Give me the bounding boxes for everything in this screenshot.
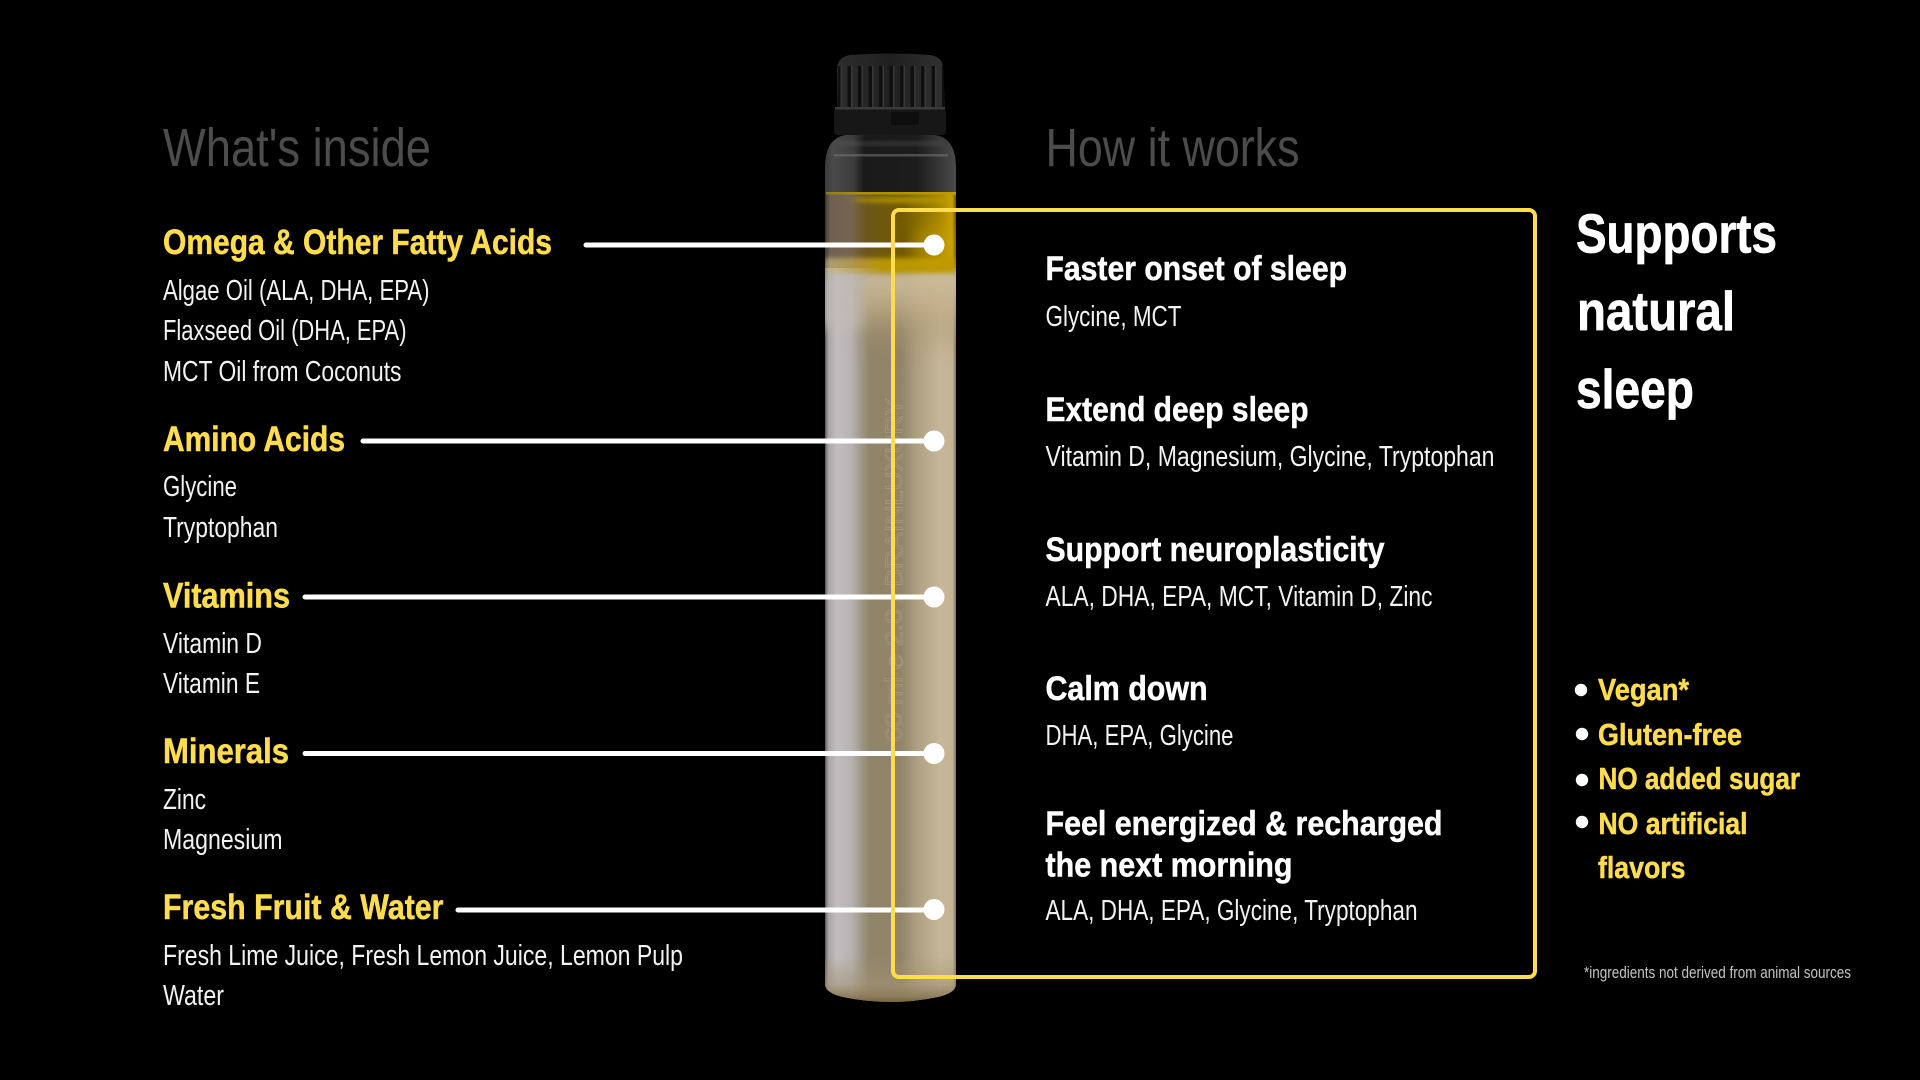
product claims list: Gluten-free <box>1598 717 1742 752</box>
benefit: feel energized and recharged: ALA, DHA, EPA, Glycine, Tryptophan <box>1046 895 1418 927</box>
bottle embossed lettering: 60 ml ℮ 2.0 / BRAINLUXURY <box>881 398 908 742</box>
headline: supports natural sleep <box>1576 202 1777 420</box>
ingredient group: omega: Flaxseed Oil (DHA, EPA) <box>163 315 406 347</box>
ingredient group: fresh fruit and water: Fresh Fruit & Water <box>163 888 444 927</box>
ingredient group: omega: MCT Oil from Coconuts <box>163 356 402 388</box>
product claims list: Vegan* <box>1598 672 1690 707</box>
ingredient group: minerals: Zinc <box>163 784 206 816</box>
ingredient group: minerals: Minerals <box>163 732 289 771</box>
connector dots <box>924 234 944 920</box>
ingredient group: vitamins: Vitamin E <box>163 668 260 700</box>
ingredient group: fresh fruit and water: Water <box>163 980 224 1012</box>
benefit: calm down: Calm down <box>1046 670 1208 708</box>
infographic canvas <box>162 54 1850 1006</box>
ingredient group: minerals <box>163 732 289 856</box>
yellow benefits frame <box>893 210 1535 977</box>
benefit: extend deep sleep: Extend deep sleep <box>1046 391 1308 429</box>
ingredient group: omega: Omega & Other Fatty Acids <box>163 223 552 262</box>
ingredient group: amino acids <box>163 420 345 544</box>
ingredient group: amino acids: Tryptophan <box>163 512 278 544</box>
benefit: extend deep sleep <box>1046 391 1494 473</box>
footnote: *ingredients not derived from animal sources <box>1584 963 1851 982</box>
benefit: faster onset of sleep <box>1046 250 1347 333</box>
panel: how it works <box>1046 118 1494 927</box>
bottle glass and liquid <box>825 135 956 1002</box>
ingredient group: vitamins <box>163 576 290 700</box>
headline: supports natural sleep: natural <box>1577 280 1735 342</box>
product claims list: NO artificial <box>1598 806 1748 841</box>
product claims list: flavors <box>1598 850 1686 885</box>
benefit: calm down: DHA, EPA, Glycine <box>1046 720 1234 752</box>
benefit: feel energized and recharged <box>1046 805 1442 927</box>
benefit: feel energized and recharged: Feel energized & recharged <box>1046 805 1442 843</box>
headline: supports natural sleep: sleep <box>1576 358 1694 420</box>
ingredient group: vitamins: Vitamin D <box>163 628 262 660</box>
ingredient group: fresh fruit and water: Fresh Lime Juice, Fresh Lemon Juice, Lemon Pulp <box>163 940 683 972</box>
benefit: faster onset of sleep: Glycine, MCT <box>1046 301 1182 333</box>
bottle cap <box>834 54 946 135</box>
product bottle <box>825 54 956 1002</box>
ingredient group: amino acids: Glycine <box>163 471 237 503</box>
benefit: support neuroplasticity: Support neuroplasticity <box>1046 531 1385 569</box>
ingredient group: minerals: Magnesium <box>163 824 282 856</box>
heading: what's inside: What's inside <box>163 118 431 178</box>
benefit: extend deep sleep: Vitamin D, Magnesium, Glycine, Tryptophan <box>1046 441 1494 473</box>
panel: what's inside <box>163 118 683 1012</box>
ingredient group: omega <box>163 223 552 388</box>
benefit: faster onset of sleep: Faster onset of sleep <box>1046 250 1347 288</box>
ingredient group: omega: Algae Oil (ALA, DHA, EPA) <box>163 275 430 307</box>
ingredient group: amino acids: Amino Acids <box>163 420 345 459</box>
benefit: support neuroplasticity: ALA, DHA, EPA, MCT, Vitamin D, Zinc <box>1046 581 1432 613</box>
benefit: support neuroplasticity <box>1046 531 1432 613</box>
benefit: calm down <box>1046 670 1234 752</box>
benefit: feel energized and recharged: the next morning <box>1046 846 1292 884</box>
headline: supports natural sleep: Supports <box>1576 202 1777 264</box>
product claims list <box>1575 672 1800 885</box>
ingredient group: vitamins: Vitamins <box>163 576 290 616</box>
ingredient group: fresh fruit and water <box>163 888 683 1012</box>
connector lines <box>305 245 930 910</box>
heading: how it works: How it works <box>1046 118 1300 178</box>
product claims list: NO added sugar <box>1598 761 1800 796</box>
